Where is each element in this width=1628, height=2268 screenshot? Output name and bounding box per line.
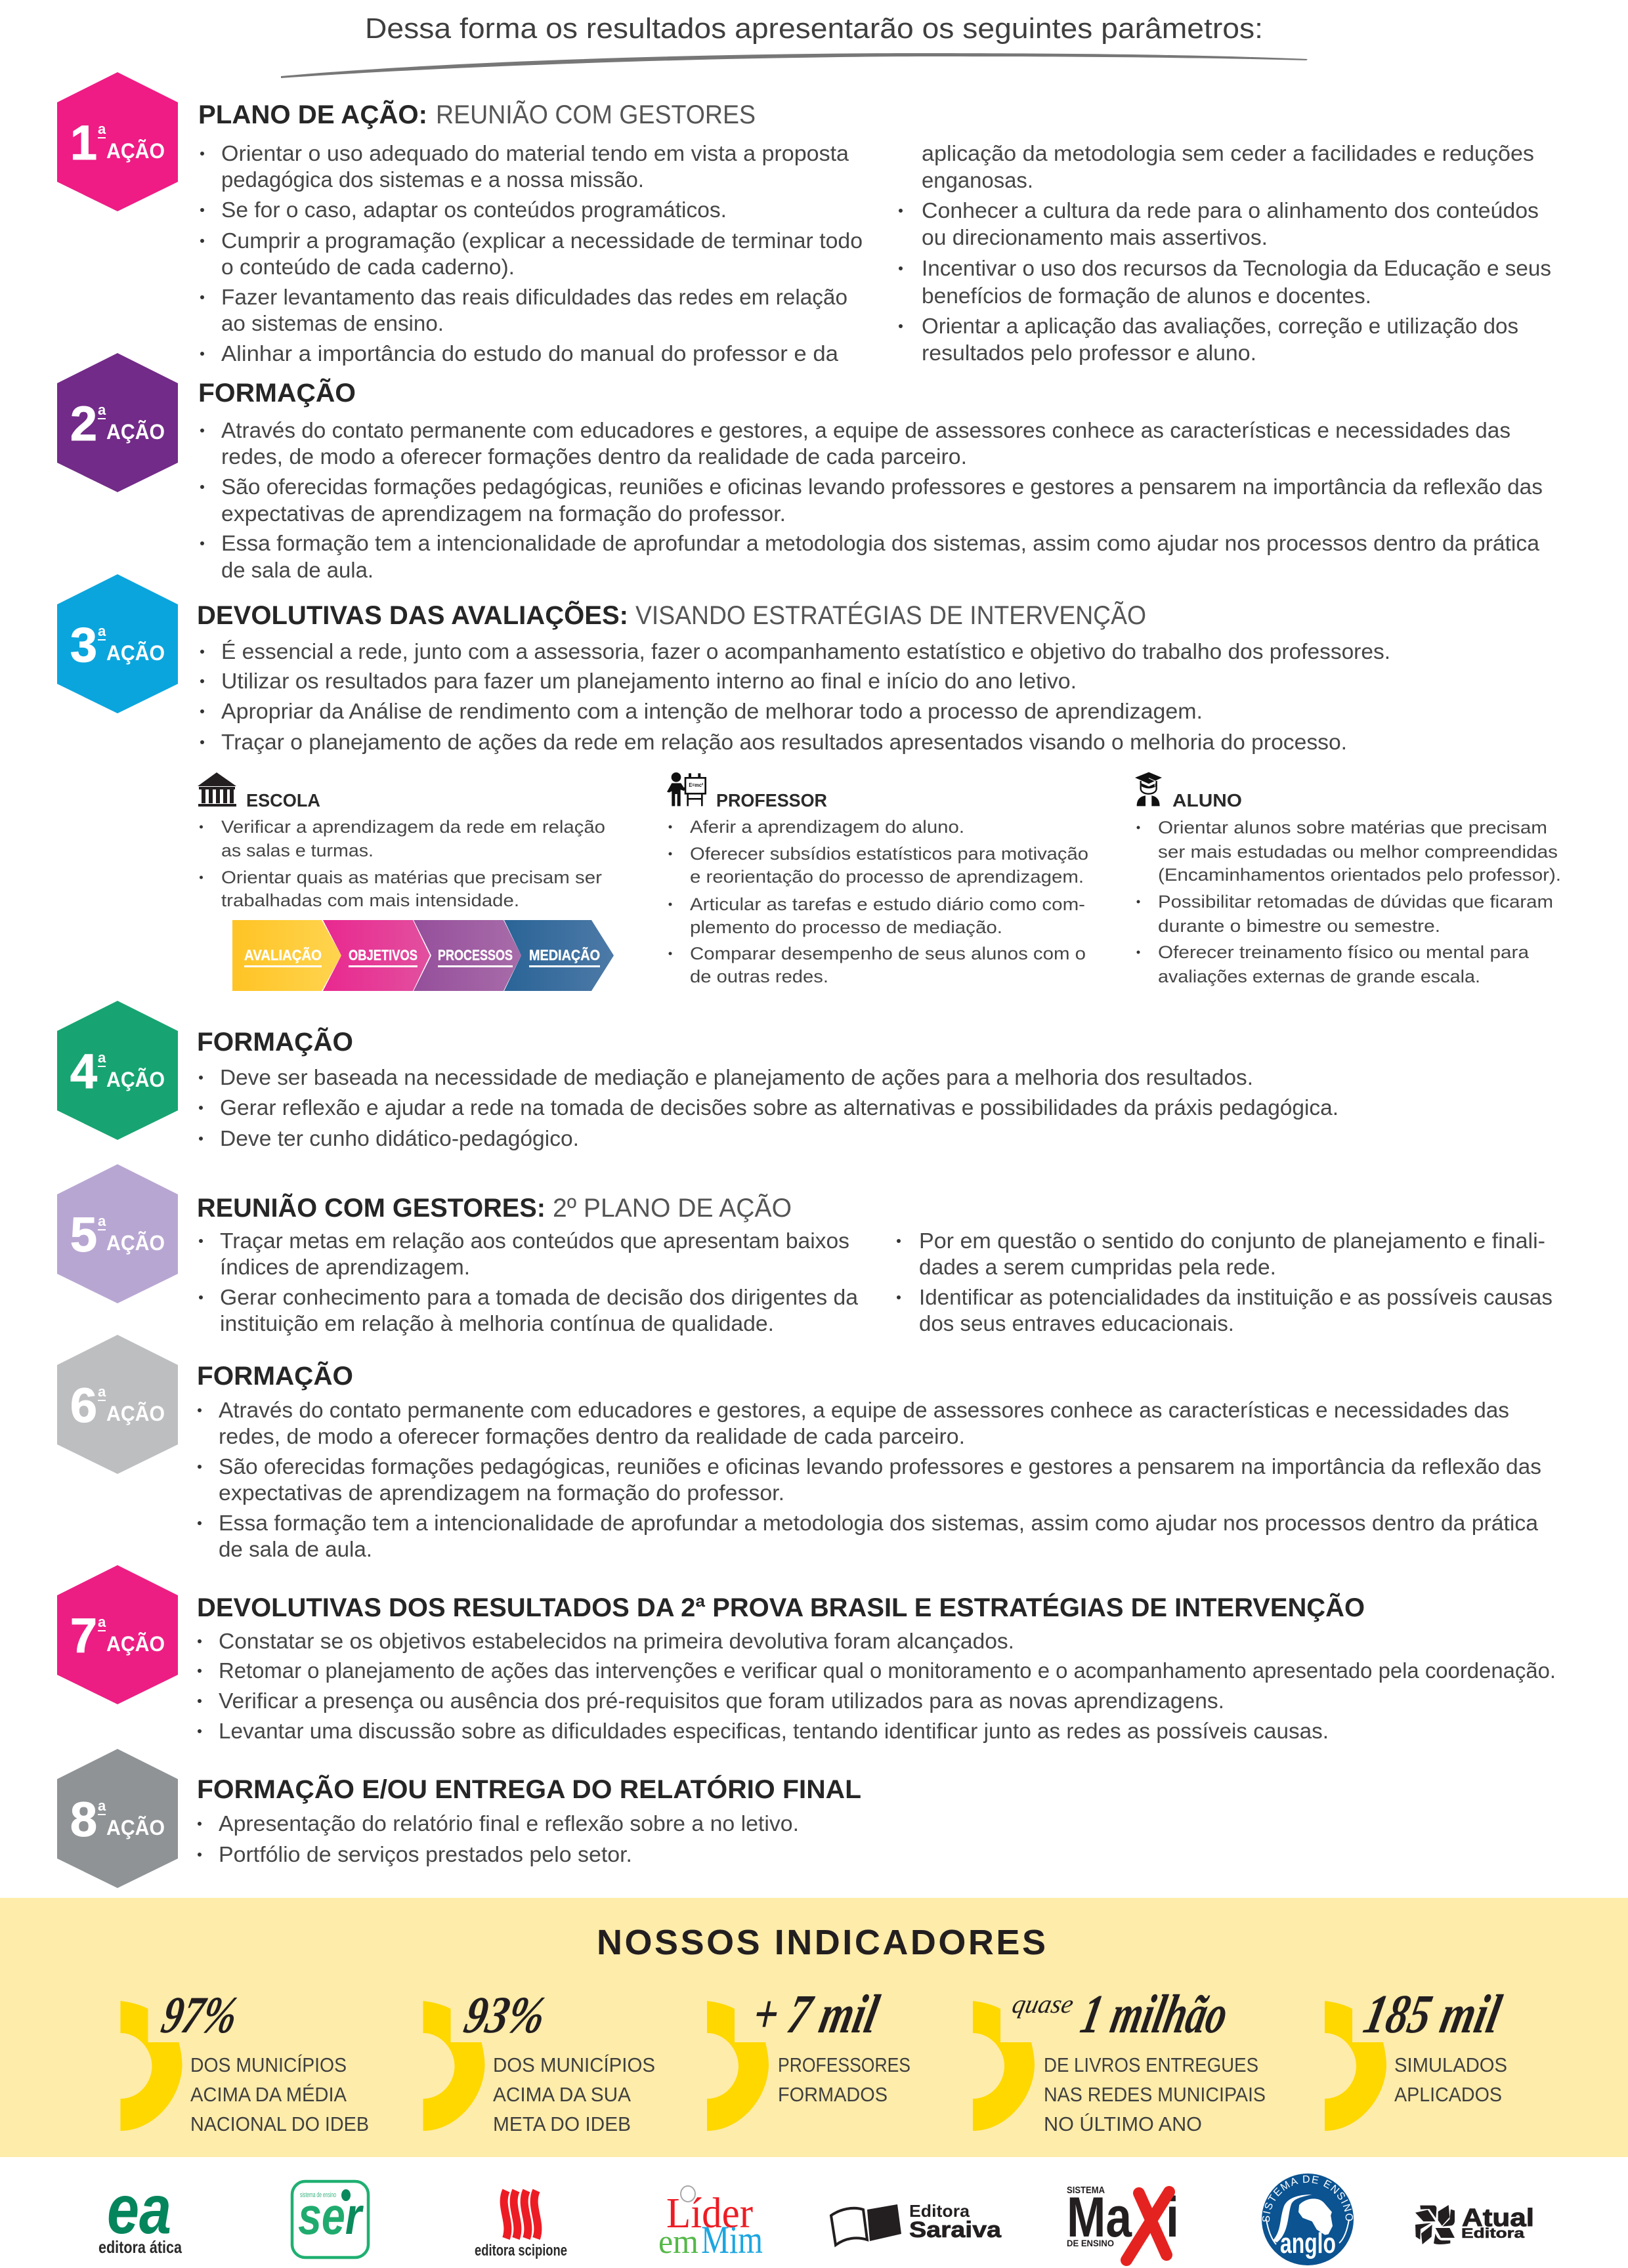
text block: bullets bbox=[198, 1398, 1541, 1561]
heading: devolutivas das avaliações: VISANDO ESTRATÉGIAS DE INTERVENÇÃO bbox=[635, 600, 1146, 630]
icon: professor bbox=[667, 772, 706, 806]
text block: right column: Orientar a aplicação das avaliações, correção e utilização dos bbox=[922, 314, 1518, 338]
text block: right column bbox=[899, 141, 1551, 365]
text block: left column: pedagógica dos sistemas e a nossa missão. bbox=[221, 167, 644, 192]
logo: anglo: SISTEMA DE ENSINO bbox=[1262, 2175, 1353, 2222]
text block: left column bbox=[199, 1228, 859, 1335]
logo: sistema maxi: i bbox=[1166, 2186, 1179, 2249]
icon: aluno bbox=[1135, 772, 1162, 806]
indicator: 93%: META DO IDEB bbox=[493, 2112, 631, 2135]
badge: 7ª ação: 7 bbox=[70, 1608, 97, 1663]
logo: ser: sistema de ensino bbox=[300, 2191, 336, 2199]
text block: left column: Gerar conhecimento para a tomada de decisão dos dirigentes da bbox=[220, 1285, 859, 1309]
indicator: 97%: ACIMA DA MÉDIA bbox=[190, 2083, 347, 2106]
logo: atual editora: Editora bbox=[1461, 2226, 1524, 2241]
badge: 2ª ação: AÇÃO bbox=[106, 420, 165, 444]
text block: left column: Orientar o uso adequado do material tendo em vista a proposta bbox=[221, 141, 849, 165]
text block: bullets: expectativas de aprendizagem na formação do professor. bbox=[221, 501, 786, 526]
indicator: quase 1 milhão: NAS REDES MUNICIPAIS bbox=[1044, 2083, 1266, 2106]
text block: right column: dos seus entraves educacionais. bbox=[919, 1311, 1234, 1335]
indicator: 97%: DOS MUNICÍPIOS bbox=[190, 2053, 347, 2076]
indicator: 185 mil: SIMULADOS bbox=[1394, 2053, 1507, 2076]
logo: editora saraiva: Editora bbox=[909, 2201, 970, 2221]
heading: reunião com gestores: 2º PLANO DE AÇÃO bbox=[553, 1193, 792, 1223]
panel: 6ª ação bbox=[57, 1335, 1541, 1561]
text block: right column: enganosas. bbox=[922, 168, 1033, 192]
text block: professor: Oferecer subsídios estatísticos para motivação bbox=[690, 844, 1088, 864]
heading: formação e/ou entrega: FORMAÇÃO E/OU ENTREGA DO RELATÓRIO FINAL bbox=[197, 1774, 861, 1804]
indicator: quase 1 milhão: 1 milhão bbox=[1076, 1984, 1233, 2045]
text block: right column: dades a serem cumpridas pela rede. bbox=[919, 1255, 1276, 1279]
badge: 1ª ação: 1 bbox=[70, 116, 97, 170]
icon: escola bbox=[198, 772, 236, 807]
text block: bullets: Essa formação tem a intencionalidade de aprofundar a metodologia dos sistemas, assim como ajudar nos processos dentro da prática bbox=[219, 1511, 1539, 1535]
text block: right column: ou direcionamento mais assertivos. bbox=[922, 225, 1268, 249]
badge: 4ª ação: 4 bbox=[70, 1044, 97, 1099]
heading: nossos indicadores: NOSSOS INDICADORES bbox=[597, 1923, 1046, 1962]
text block: aluno: ser mais estudadas ou melhor compreendidas bbox=[1158, 842, 1558, 862]
logo: editora saraiva: Saraiva bbox=[909, 2217, 1002, 2242]
text block: aluno: avaliações externas de grande escala. bbox=[1158, 967, 1480, 986]
badge: 2ª ação: a bbox=[98, 402, 106, 418]
badge: 3ª ação: 3 bbox=[70, 618, 97, 672]
badge: 1ª ação: a bbox=[98, 121, 106, 137]
text block: aluno: durante o bimestre ou semestre. bbox=[1158, 916, 1440, 936]
panel: 8ª ação bbox=[57, 1749, 861, 1888]
logo: sistema maxi: DE ENSINO bbox=[1067, 2238, 1114, 2248]
badge: 4ª ação bbox=[57, 1001, 178, 1140]
logos row bbox=[98, 2171, 1534, 2266]
panel: 7ª ação bbox=[57, 1565, 1556, 1743]
badge: 6ª ação: AÇÃO bbox=[106, 1402, 165, 1425]
panel: 5ª ação bbox=[57, 1164, 1553, 1335]
heading: aluno: ALUNO bbox=[1172, 790, 1242, 810]
logo: editora scipione bbox=[475, 2191, 567, 2259]
title bbox=[281, 12, 1308, 78]
indicator: 93%: 93% bbox=[460, 1986, 551, 2044]
text block: left column: Traçar metas em relação aos conteúdos que apresentam baixos bbox=[220, 1228, 849, 1253]
indicator: 185 mil bbox=[1325, 1984, 1507, 2131]
chevron flow: avaliação, objetivos, processos, mediação: MEDIAÇÃO bbox=[529, 947, 600, 963]
text block: escola bbox=[200, 817, 605, 910]
badge: 6ª ação bbox=[57, 1335, 178, 1474]
text block: right column bbox=[897, 1228, 1553, 1335]
logo: sistema maxi bbox=[1067, 2185, 1179, 2260]
badge: 2ª ação: 2 bbox=[70, 396, 97, 451]
badge: 1ª ação bbox=[57, 72, 178, 211]
badge: 6ª ação: a bbox=[98, 1383, 106, 1400]
text block: aluno bbox=[1137, 818, 1561, 986]
text block: right column: benefícios de formação de alunos e docentes. bbox=[922, 284, 1371, 308]
panel: 3ª ação bbox=[57, 574, 1561, 991]
logo: editora ática: editora ática bbox=[98, 2237, 182, 2257]
badge: 3ª ação: a bbox=[98, 623, 106, 639]
title: Dessa forma os resultados apresentarão os seguintes parâmetros: bbox=[365, 12, 1263, 45]
indicator: quase 1 milhão: NO ÚLTIMO ANO bbox=[1044, 2112, 1202, 2135]
text block: left column: o conteúdo de cada caderno). bbox=[221, 255, 515, 279]
badge: 7ª ação: AÇÃO bbox=[106, 1632, 165, 1656]
text block: bullets: Através do contato permanente com educadores e gestores, a equipe de assessores conhece as características e necessidades das bbox=[221, 418, 1510, 442]
indicator: + 7 mil: + 7 mil bbox=[748, 1984, 884, 2045]
panel: 4ª ação bbox=[57, 1001, 1339, 1150]
text block: bullets: É essencial a rede, junto com a assessoria, fazer o acompanhamento estatístico e objetivo do trabalho dos professores. bbox=[221, 639, 1390, 663]
text block: aluno: Oferecer treinamento físico ou mental para bbox=[1158, 942, 1530, 962]
text block: bullets: Deve ter cunho didático-pedagógico. bbox=[220, 1126, 579, 1150]
heading: formação: FORMAÇÃO bbox=[197, 1360, 353, 1391]
text block: bullets: redes, de modo a oferecer formações dentro da realidade de cada parceiro. bbox=[221, 444, 967, 469]
panel: 2ª ação bbox=[57, 353, 1543, 582]
text block: bullets bbox=[199, 1065, 1339, 1150]
logo: sistema maxi: Ma bbox=[1067, 2186, 1132, 2249]
text block: professor: Comparar desempenho de seus alunos com o bbox=[690, 944, 1086, 963]
text block: right column: Por em questão o sentido do conjunto de planejamento e finali- bbox=[919, 1228, 1545, 1253]
badge: 3ª ação: AÇÃO bbox=[106, 641, 165, 665]
badge: 3ª ação bbox=[57, 574, 178, 713]
heading: reunião com gestores bbox=[197, 1192, 792, 1223]
badge: 7ª ação bbox=[57, 1565, 178, 1704]
text block: bullets bbox=[198, 1811, 799, 1866]
badge: 4ª ação: AÇÃO bbox=[106, 1068, 165, 1091]
text block: bullets: Gerar reflexão e ajudar a rede na tomada de decisões sobre as alternativas e possibilidades da práxis pedagógica. bbox=[220, 1095, 1339, 1120]
heading: formação: FORMAÇÃO bbox=[198, 377, 356, 408]
indicator: 93%: DOS MUNICÍPIOS bbox=[493, 2053, 655, 2076]
indicator: 97% bbox=[121, 1986, 369, 2135]
chevron flow: avaliação, objetivos, processos, mediação: AVALIAÇÃO bbox=[244, 947, 322, 963]
logo: atual editora: Atual bbox=[1462, 2204, 1534, 2232]
text block: bullets: Utilizar os resultados para fazer um planejamento interno ao final e início do ano letivo. bbox=[221, 669, 1077, 693]
text block: left column: Cumprir a programação (explicar a necessidade de terminar todo bbox=[221, 228, 863, 253]
logo: anglo bbox=[1262, 2174, 1354, 2265]
text block: bullets: expectativas de aprendizagem na formação do professor. bbox=[219, 1480, 784, 1505]
text block: bullets: redes, de modo a oferecer formações dentro da realidade de cada parceiro. bbox=[219, 1424, 965, 1448]
logo: ser bbox=[292, 2181, 368, 2258]
text block: bullets: Apresentação do relatório final e reflexão sobre a no letivo. bbox=[219, 1811, 799, 1836]
text block: bullets bbox=[198, 1629, 1556, 1743]
indicator: + 7 mil: FORMADOS bbox=[778, 2083, 888, 2106]
heading: devolutivas das avaliações bbox=[197, 600, 1146, 630]
text block: left column: Alinhar a importância do estudo do manual do professor e da bbox=[221, 341, 839, 366]
badge: 6ª ação: 6 bbox=[70, 1378, 97, 1433]
chevron flow: avaliação, objetivos, processos, mediação: OBJETIVOS bbox=[349, 947, 418, 963]
text block: right column: resultados pelo professor e aluno. bbox=[922, 341, 1256, 365]
text block: bullets bbox=[200, 639, 1390, 754]
text block: right column: Identificar as potencialidades da instituição e as possíveis causas bbox=[919, 1285, 1553, 1309]
panel: 1ª ação bbox=[57, 72, 1551, 366]
heading: escola: ESCOLA bbox=[246, 790, 320, 810]
text block: left column: Fazer levantamento das reais dificuldades das redes em relação bbox=[221, 285, 847, 309]
text block: left column: índices de aprendizagem. bbox=[220, 1255, 470, 1279]
text block: bullets: Retomar o planejamento de ações das intervenções e verificar qual o monitoramento e o acompanhamento apresentado pela coordenação. bbox=[219, 1658, 1556, 1683]
text block: bullets: Portfólio de serviços prestados pelo setor. bbox=[219, 1842, 632, 1866]
heading: plano de ação bbox=[198, 99, 756, 129]
text block: professor: Articular as tarefas e estudo diário como com- bbox=[690, 894, 1085, 914]
badge: 5ª ação: AÇÃO bbox=[106, 1231, 165, 1255]
text block: right column: Incentivar o uso dos recursos da Tecnologia da Educação e seus bbox=[922, 256, 1551, 280]
text block: professor: de outras redes. bbox=[690, 967, 828, 986]
logo: atual editora bbox=[1415, 2204, 1534, 2244]
text block: bullets: Verificar a presença ou ausência dos pré-requisitos que foram utilizados para as novas aprendizagens. bbox=[219, 1689, 1224, 1713]
text block: left column: instituição em relação à melhoria contínua de qualidade. bbox=[220, 1311, 774, 1335]
text block: aluno: (Encaminhamentos orientados pelo professor). bbox=[1158, 865, 1561, 885]
text block: right column: Conhecer a cultura da rede para o alinhamento dos conteúdos bbox=[922, 198, 1539, 222]
panel: nossos indicadores bbox=[0, 1898, 1628, 2157]
badge: 8ª ação: AÇÃO bbox=[106, 1816, 165, 1839]
text block: bullets: São oferecidas formações pedagógicas, reuniões e oficinas levando professores e gestores a pensarem na importância da reflexão das bbox=[221, 474, 1543, 499]
text block: bullets bbox=[200, 418, 1543, 582]
text block: professor: e reorientação do processo de aprendizagem. bbox=[690, 867, 1084, 887]
indicator: 93%: ACIMA DA SUA bbox=[493, 2083, 631, 2106]
text block: bullets: Traçar o planejamento de ações da rede em relação aos resultados apresentados visando o melhoria do processo. bbox=[221, 730, 1347, 754]
text block: right column: aplicação da metodologia sem ceder a facilidades e reduções bbox=[922, 141, 1534, 165]
heading: devolutivas dos resultados: DEVOLUTIVAS DOS RESULTADOS DA 2ª PROVA BRASIL E ESTRATÉGIAS DE INTERVENÇÃO bbox=[197, 1592, 1365, 1622]
logo: editora ática: ea bbox=[107, 2171, 171, 2248]
logo: anglo: anglo bbox=[1280, 2227, 1336, 2259]
indicator: quase 1 milhão: DE LIVROS ENTREGUES bbox=[1044, 2053, 1258, 2076]
badge: 8ª ação: a bbox=[98, 1797, 106, 1814]
chevron flow: avaliação, objetivos, processos, mediação: PROCESSOS bbox=[438, 947, 513, 963]
text block: bullets: Apropriar da Análise de rendimento com a intenção de melhorar todo a processo de aprendizagem. bbox=[221, 699, 1203, 723]
badge: 4ª ação: a bbox=[98, 1049, 106, 1066]
text block: bullets: Constatar se os objetivos estabelecidos na primeira devolutiva foram alcançados. bbox=[219, 1629, 1014, 1653]
chevron flow: avaliação, objetivos, processos, mediação bbox=[232, 920, 614, 991]
badge: 7ª ação: a bbox=[98, 1614, 106, 1630]
heading: professor: PROFESSOR bbox=[716, 790, 827, 810]
icon: professor: E=mc² bbox=[689, 782, 704, 788]
logo: líder em mim: Mim bbox=[701, 2218, 763, 2261]
indicator: 97%: NACIONAL DO IDEB bbox=[190, 2112, 369, 2135]
logo: sistema maxi: SISTEMA bbox=[1067, 2185, 1105, 2196]
text block: bullets: Essa formação tem a intencionalidade de aprofundar a metodologia dos sistemas, assim como ajudar nos processos dentro da prática bbox=[221, 531, 1540, 555]
heading: reunião com gestores: REUNIÃO COM GESTORES: bbox=[197, 1192, 546, 1223]
text block: left column: ao sistemas de ensino. bbox=[221, 311, 444, 335]
text block: bullets: São oferecidas formações pedagógicas, reuniões e oficinas levando professores e gestores a pensarem na importância da reflexão das bbox=[219, 1454, 1541, 1479]
text block: escola: Orientar quais as matérias que precisam ser bbox=[221, 868, 602, 887]
text block: bullets: de sala de aula. bbox=[219, 1537, 372, 1561]
text block: left column bbox=[200, 141, 863, 366]
indicator: 185 mil: 185 mil bbox=[1359, 1984, 1507, 2045]
badge: 8ª ação: 8 bbox=[70, 1792, 97, 1847]
text block: bullets: de sala de aula. bbox=[221, 558, 374, 582]
indicator: quase 1 milhão bbox=[973, 1984, 1266, 2135]
indicator: 97%: 97% bbox=[157, 1986, 243, 2044]
heading: devolutivas das avaliações: DEVOLUTIVAS DAS AVALIAÇÕES: bbox=[197, 600, 628, 630]
logo: editora scipione: editora scipione bbox=[475, 2242, 567, 2259]
text block: professor: Aferir a aprendizagem do aluno. bbox=[690, 817, 964, 837]
heading: plano de ação: PLANO DE AÇÃO: bbox=[198, 99, 427, 129]
text block: escola: Verificar a aprendizagem da rede em relação bbox=[221, 817, 605, 837]
text block: professor: plemento do processo de mediação. bbox=[690, 917, 1002, 937]
text block: escola: as salas e turmas. bbox=[221, 841, 374, 860]
text block: professor bbox=[668, 817, 1088, 986]
logo: líder em mim bbox=[658, 2186, 763, 2261]
text block: bullets: Levantar uma discussão sobre as dificuldades especificas, tentando identificar junto as redes as possíveis causas. bbox=[219, 1719, 1329, 1743]
text block: aluno: Possibilitar retomadas de dúvidas que ficaram bbox=[1158, 892, 1553, 912]
heading: plano de ação: REUNIÃO COM GESTORES bbox=[436, 100, 756, 129]
text block: aluno: Orientar alunos sobre matérias que precisam bbox=[1158, 818, 1547, 837]
badge: 5ª ação: a bbox=[98, 1213, 106, 1229]
badge: 2ª ação bbox=[57, 353, 178, 492]
logo: ser: ser bbox=[298, 2187, 364, 2245]
indicator: 93% bbox=[423, 1986, 655, 2135]
indicator: 185 mil: APLICADOS bbox=[1394, 2083, 1502, 2106]
badge: 1ª ação: AÇÃO bbox=[106, 139, 165, 163]
badge: 5ª ação: 5 bbox=[70, 1208, 97, 1262]
text block: escola: trabalhadas com mais intensidade. bbox=[221, 891, 519, 910]
text block: bullets: Através do contato permanente com educadores e gestores, a equipe de assessores conhece as características e necessidades das bbox=[219, 1398, 1509, 1422]
logo: líder em mim: em bbox=[658, 2223, 698, 2261]
logo: editora saraiva bbox=[831, 2201, 1002, 2245]
indicator: + 7 mil bbox=[707, 1984, 910, 2131]
heading: formação: FORMAÇÃO bbox=[197, 1026, 353, 1057]
indicator: + 7 mil: PROFESSORES bbox=[778, 2053, 910, 2076]
logo: líder em mim: Líder bbox=[666, 2189, 753, 2237]
text block: bullets: Deve ser baseada na necessidade de mediação e planejamento de ações para a melhoria dos resultados. bbox=[220, 1065, 1253, 1089]
badge: 8ª ação bbox=[57, 1749, 178, 1888]
badge: 5ª ação bbox=[57, 1164, 178, 1303]
text block: left column: Se for o caso, adaptar os conteúdos programáticos. bbox=[221, 198, 727, 222]
indicator: quase 1 milhão: quase bbox=[1010, 1989, 1077, 2019]
